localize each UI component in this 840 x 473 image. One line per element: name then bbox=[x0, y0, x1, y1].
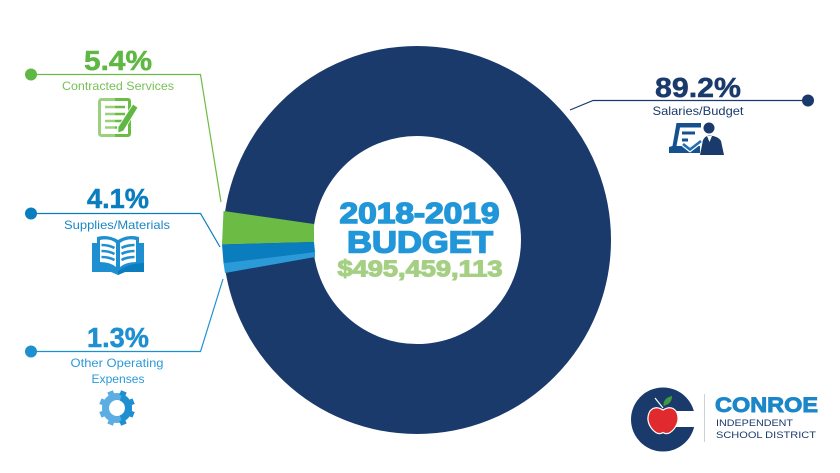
center title bbox=[338, 198, 502, 282]
heading: budget: BUDGET bbox=[347, 224, 493, 260]
donut chart bbox=[222, 91, 566, 389]
percentage: 1.3% bbox=[87, 322, 149, 353]
callout: other operating expenses bbox=[25, 279, 223, 425]
label: Contracted Services bbox=[62, 79, 174, 93]
callout: salaries and budget bbox=[570, 72, 814, 155]
logo subtitle line two: SCHOOL DISTRICT bbox=[716, 430, 816, 441]
logo: Conroe ISD bbox=[631, 388, 818, 452]
leader dot bbox=[25, 68, 37, 80]
label: Salaries/Budget bbox=[652, 104, 744, 118]
leader line bbox=[31, 214, 220, 247]
label: Supplies/Materials bbox=[64, 218, 170, 232]
icon: gear bbox=[100, 391, 134, 425]
label line two: Expenses bbox=[92, 372, 144, 386]
logo subtitle line one: INDEPENDENT bbox=[716, 418, 793, 429]
label line one: Other Operating bbox=[70, 356, 164, 370]
donut segment: other operating 1.3% bbox=[224, 252, 315, 273]
leader line bbox=[570, 100, 808, 110]
percentage: 5.4% bbox=[84, 45, 152, 76]
percentage: 89.2% bbox=[655, 72, 741, 103]
icon: open book bbox=[92, 236, 144, 275]
budget amount: $495,459,113 bbox=[338, 256, 502, 282]
logo wordmark: CONROE bbox=[715, 394, 818, 417]
leader dot bbox=[25, 208, 37, 220]
callout: contracted services bbox=[25, 45, 221, 202]
logo divider bbox=[704, 394, 705, 442]
icon: document and pencil bbox=[100, 100, 138, 136]
heading: years: 2018-2019 bbox=[340, 198, 500, 230]
leader dot bbox=[25, 346, 37, 358]
donut segment: supplies 4.1% bbox=[222, 242, 315, 263]
donut segment: contracted services 5.4% bbox=[222, 211, 314, 244]
percentage: 4.1% bbox=[87, 183, 149, 214]
icon: person at board bbox=[669, 122, 724, 155]
leader line bbox=[31, 279, 223, 352]
donut segment: salaries 89.2% bbox=[268, 91, 566, 389]
logo mark: C with apple bbox=[631, 388, 698, 452]
leader dot bbox=[802, 94, 814, 106]
leader line bbox=[31, 74, 221, 202]
callout: supplies and materials bbox=[25, 183, 220, 275]
